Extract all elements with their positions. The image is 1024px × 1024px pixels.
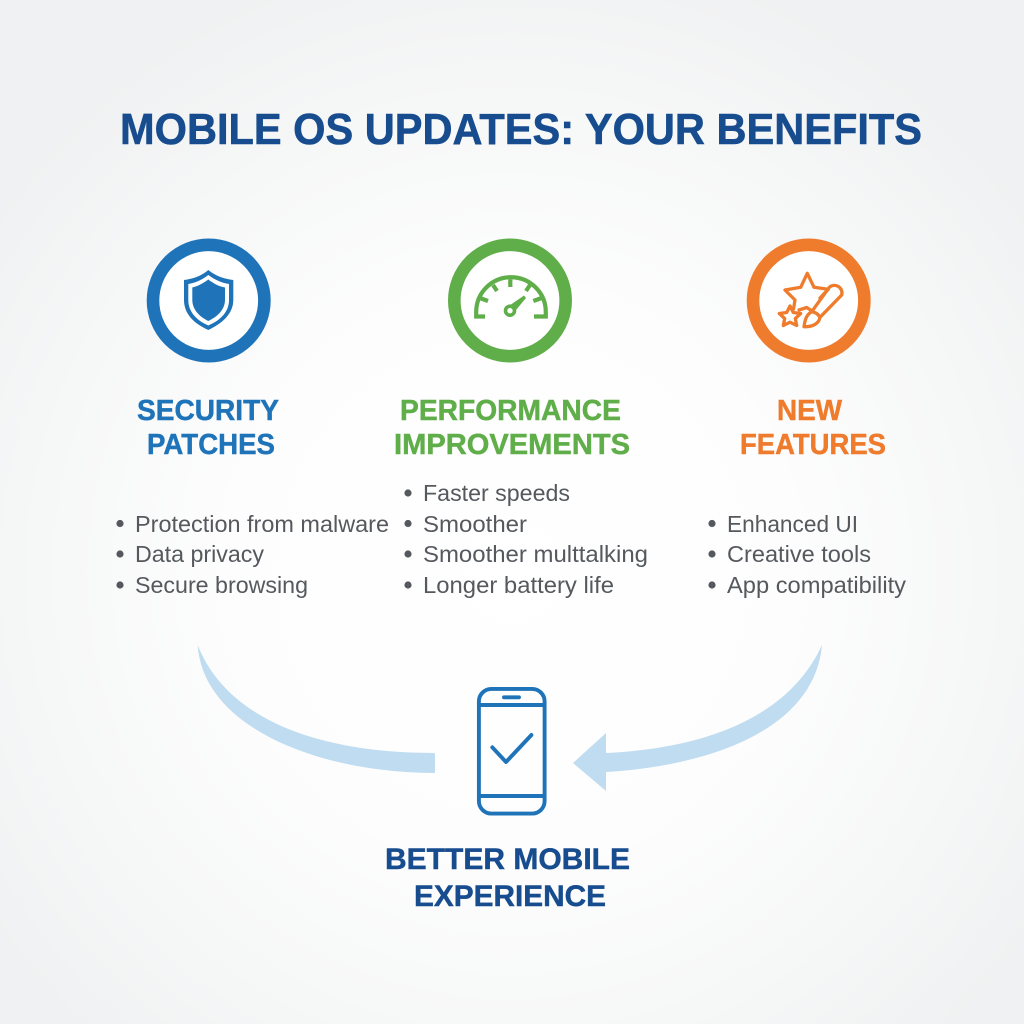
title: MOBILE OS UPDATES: YOUR BENEFITS [120, 105, 922, 154]
heading: performance improvements [394, 395, 630, 461]
heading: performance improvements: IMPROVEMENTS [394, 429, 630, 461]
heading: performance improvements: PERFORMANCE [400, 395, 621, 427]
bullet list: new features: App compatibility [727, 572, 907, 598]
icon: phone with check mark [479, 689, 545, 814]
bullet list: security: Secure browsing [135, 572, 308, 598]
heading: better mobile experience: BETTER MOBILE [385, 843, 630, 876]
bullet list: new features [708, 511, 907, 598]
bullet list: performance: Smoother multtalking [423, 541, 648, 567]
heading: new features: FEATURES [740, 429, 886, 461]
bullet list: security: Protection from malware [135, 511, 389, 537]
bullet list: performance: Faster speeds [423, 480, 570, 506]
bullet list: performance [404, 480, 648, 598]
bullet list: security: Data privacy [135, 541, 265, 567]
heading: security patches: PATCHES [147, 429, 275, 461]
heading: new features [740, 395, 886, 461]
panel: performance improvements [394, 245, 648, 598]
heading: better mobile experience [385, 843, 630, 913]
bullet list: performance: Longer battery life [423, 572, 614, 598]
panel: security patches [116, 245, 389, 598]
heading: security patches [137, 395, 279, 461]
heading: new features: NEW [777, 395, 842, 427]
bullet list: new features: Enhanced UI [727, 511, 858, 537]
heading: better mobile experience: EXPERIENCE [414, 880, 606, 913]
bullet list: security [116, 511, 389, 598]
panel: new features [708, 245, 907, 598]
icon: speedometer in green ring [454, 245, 566, 356]
bullet list: new features: Creative tools [727, 541, 871, 567]
arrow: left curved band [198, 645, 435, 773]
heading: security patches: SECURITY [137, 395, 279, 427]
icon: stars and pencil in orange ring [753, 245, 864, 356]
bullet list: performance: Smoother [423, 511, 527, 537]
icon: shield in blue ring [153, 245, 264, 356]
arrow: right curved arrow pointing to phone [573, 645, 822, 791]
